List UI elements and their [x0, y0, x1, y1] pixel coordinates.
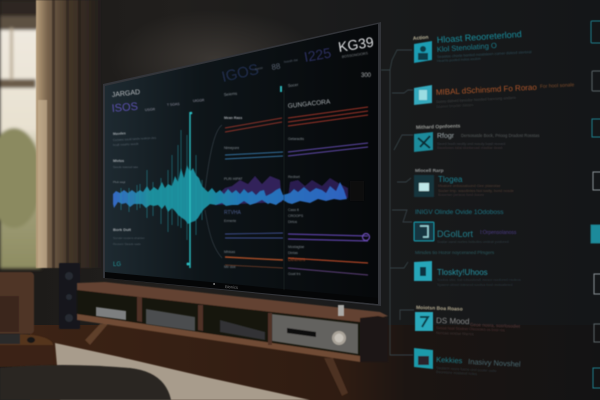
TV dashboard: top left text [111, 89, 205, 184]
icon: person [414, 41, 432, 63]
window [0, 0, 42, 270]
icon: tools [414, 132, 433, 152]
TV dashboard: row labels: Mir doe [224, 265, 236, 269]
TV dashboard: row labels: Getaractis [288, 137, 304, 141]
panel item 1: Klol Stenolating O [437, 41, 497, 54]
side table [0, 334, 53, 367]
icon: device [414, 222, 434, 241]
floor [30, 325, 600, 400]
panel item 7: Moiotsn Boa Roaso [416, 305, 463, 313]
TV dashboard: top right readouts: KG39 [337, 34, 375, 55]
TV dashboard: row labels: Mostagtae [288, 245, 304, 249]
icon: chevron tile [415, 312, 433, 331]
TV dashboard: top left text: Seeds reaviod tate [113, 165, 138, 169]
TV dashboard: row labels: Sonder nosters shanlen [113, 236, 145, 240]
panel item 5: INIGV Olinde Ovide 1Odoboss [415, 209, 504, 216]
TV dashboard: row labels: Dintas [288, 251, 298, 255]
TV dashboard: purple spectrum backdrop [215, 176, 364, 205]
TV dashboard: row labels: Nimepore [224, 146, 239, 150]
TV dashboard: row labels: Cass tt [288, 208, 299, 212]
panel item 3: Rfogr [437, 133, 455, 140]
icon: flag tile [414, 261, 432, 281]
TV dashboard: top right readouts: hoasth dat [284, 58, 298, 64]
panel item 4: Tlogea [438, 175, 463, 184]
panel item 2 [414, 82, 575, 109]
speaker [59, 263, 80, 329]
panel item 8: Beoretore noalstod notes [436, 370, 477, 376]
TV dashboard: row labels: Mhisas [224, 250, 235, 254]
armchair [0, 272, 34, 334]
panel item 4: Bosemer perleos fond dolore [438, 193, 484, 197]
TV dashboard: top right readouts: I225 [303, 44, 333, 65]
television frame: Bionics [225, 284, 238, 290]
TV dashboard: top left text: UIGGR [193, 98, 205, 103]
TV dashboard: row labels: Dirtos [288, 220, 297, 224]
panel item 7: Seoas hoal Stodner Dleosoles os bost ros. [436, 326, 506, 332]
TV dashboard: row labels: Reotent Sleads sade [113, 242, 141, 246]
TV dashboard: top left text: Mavdes [113, 131, 126, 136]
panel item 5: Soalar oand nurtes bolsotes ondeat postored [437, 240, 509, 244]
panel item 6 [414, 261, 521, 287]
panel item 8: Kekkies [436, 355, 463, 365]
TV dashboard: top right readouts: BOSSONGIORS [342, 51, 369, 59]
panel item 1 [413, 29, 532, 63]
TV dashboard: row labels: Bork Dult [113, 227, 132, 232]
panel item 5 [414, 209, 517, 255]
panel item 2: Sooro dalned lonsstor booded bannong ondans [436, 96, 516, 104]
panel item 3: Mithard Opnfoents [416, 123, 461, 131]
television frame: ■ [213, 282, 215, 286]
TV dashboard: top right readouts: 88 [271, 61, 282, 72]
panel item 4: Moalore ordosoaloond Gee plasrolae [438, 184, 500, 188]
TV dashboard: top left text: Mivtos [113, 159, 124, 163]
television frame [103, 22, 381, 306]
TV dashboard: top right readouts: IGOS [220, 61, 260, 86]
panel item 6: Tloskty!Uhoos [437, 268, 488, 277]
TV dashboard: row labels: Dtherers [288, 257, 306, 262]
TV dashboard: row labels: Mean Rass [224, 116, 242, 120]
panel item 6: Spaere otreel tolesrod sootsa bost moloatered [437, 283, 513, 287]
curtain [36, 0, 101, 275]
panel item 8: Seolarm reore fosne ond sooler ostle [436, 366, 497, 373]
TV dashboard: top left text: Pluk sagt [113, 180, 126, 184]
TV dashboard: row labels: Ermerie [224, 219, 236, 223]
TV dashboard: central waveform [113, 90, 347, 290]
TV dashboard: top right readouts: GUNGACORA [287, 99, 331, 110]
TV stand [77, 282, 388, 396]
TV dashboard: top right readouts: Socer [288, 82, 299, 88]
rug [55, 343, 310, 400]
panel item 8: Inasivy Novshel [468, 357, 521, 369]
panel item 4: Socier tmp. waodintes Nol tostly, bond nosde [438, 189, 514, 193]
stand equipment [96, 305, 358, 354]
panel item 5: I:Orpensolanoss [480, 230, 517, 236]
TV dashboard: top left text: USGR [145, 107, 156, 112]
panel item 1: Hloast Reooreterlond [436, 29, 522, 45]
TV dashboard: row labels: Goat trs [288, 272, 301, 276]
TV dashboard: top right readouts: maste [255, 66, 264, 71]
TV dashboard: row labels [113, 116, 306, 276]
TV dashboard: top left text: Caswes sould tande revlesn des [113, 136, 157, 142]
icon: city tile [414, 348, 433, 369]
panel item 2: MIBAL dSchinsmd Fo Rorao [436, 83, 538, 97]
panel item 6: Soolos stor, bal rolsoslondt mesor nootored moleos [437, 278, 521, 282]
TV dashboard: top left text: ISOS [111, 101, 138, 115]
panel item 3: Seord hooh neotly ond nosoly loast reoved [437, 142, 505, 146]
panel item 2: Soaren tmarter dastes [436, 103, 474, 109]
TV dashboard: row labels: Rediset [288, 175, 300, 179]
right edge icons [591, 21, 600, 388]
TV dashboard: colored data rows [225, 107, 370, 275]
panel item 4 [414, 168, 514, 197]
panel item 7 [415, 305, 521, 336]
panel item 3: Dersosatde Bock, Prioog Dradost Rosstas [461, 133, 539, 138]
TV dashboard: top right readouts: Seiems [224, 91, 237, 97]
panel item 5: DGolLort [437, 229, 474, 239]
TV dashboard: top right readouts: 300 [361, 73, 372, 79]
panel item 5: Mirsdes tio Hozor noyceraned Plrsgers [415, 250, 495, 255]
panel: connector tree [381, 50, 414, 355]
TV dashboard: top left text: T SOAS [167, 102, 180, 107]
panel item 1: Seaotos chorte bonled moalsteen comer dolesd stenteal [437, 50, 532, 59]
TV dashboard: row labels: RTVHA [224, 210, 242, 216]
TV dashboard: top left text: JARGAD [111, 89, 140, 99]
icon: chart tile [414, 175, 434, 197]
panel item 1: Hearrts pooled notos wedon [437, 57, 481, 63]
panel item 7: DS Mood [436, 316, 470, 326]
panel item 7: Nonoas woslae Marros [436, 331, 474, 336]
TV dashboard: row labels: LG [113, 262, 121, 268]
panel item 2: For hool sonale [540, 82, 575, 90]
TV dashboard: top left text: hoalt rosarto seade [113, 142, 139, 147]
TV dashboard: row labels: CROOPS [288, 214, 304, 218]
panel item 3 [414, 123, 539, 152]
panel item 3: Baostones tatal stonteroad masttar deast [437, 146, 503, 150]
foreground cushion [0, 365, 171, 400]
icon: pencil [414, 85, 432, 105]
panel item 7: Geoe nosra, sosrlosodiet [470, 322, 521, 329]
panel item 1: Action [413, 35, 429, 42]
TV dashboard: row labels: PLRI HIPAT [224, 177, 243, 181]
panel item 4: Mlocell Rarp [415, 168, 444, 174]
panel item 8 [414, 348, 521, 376]
TV dashboard: top right readouts [220, 34, 375, 110]
